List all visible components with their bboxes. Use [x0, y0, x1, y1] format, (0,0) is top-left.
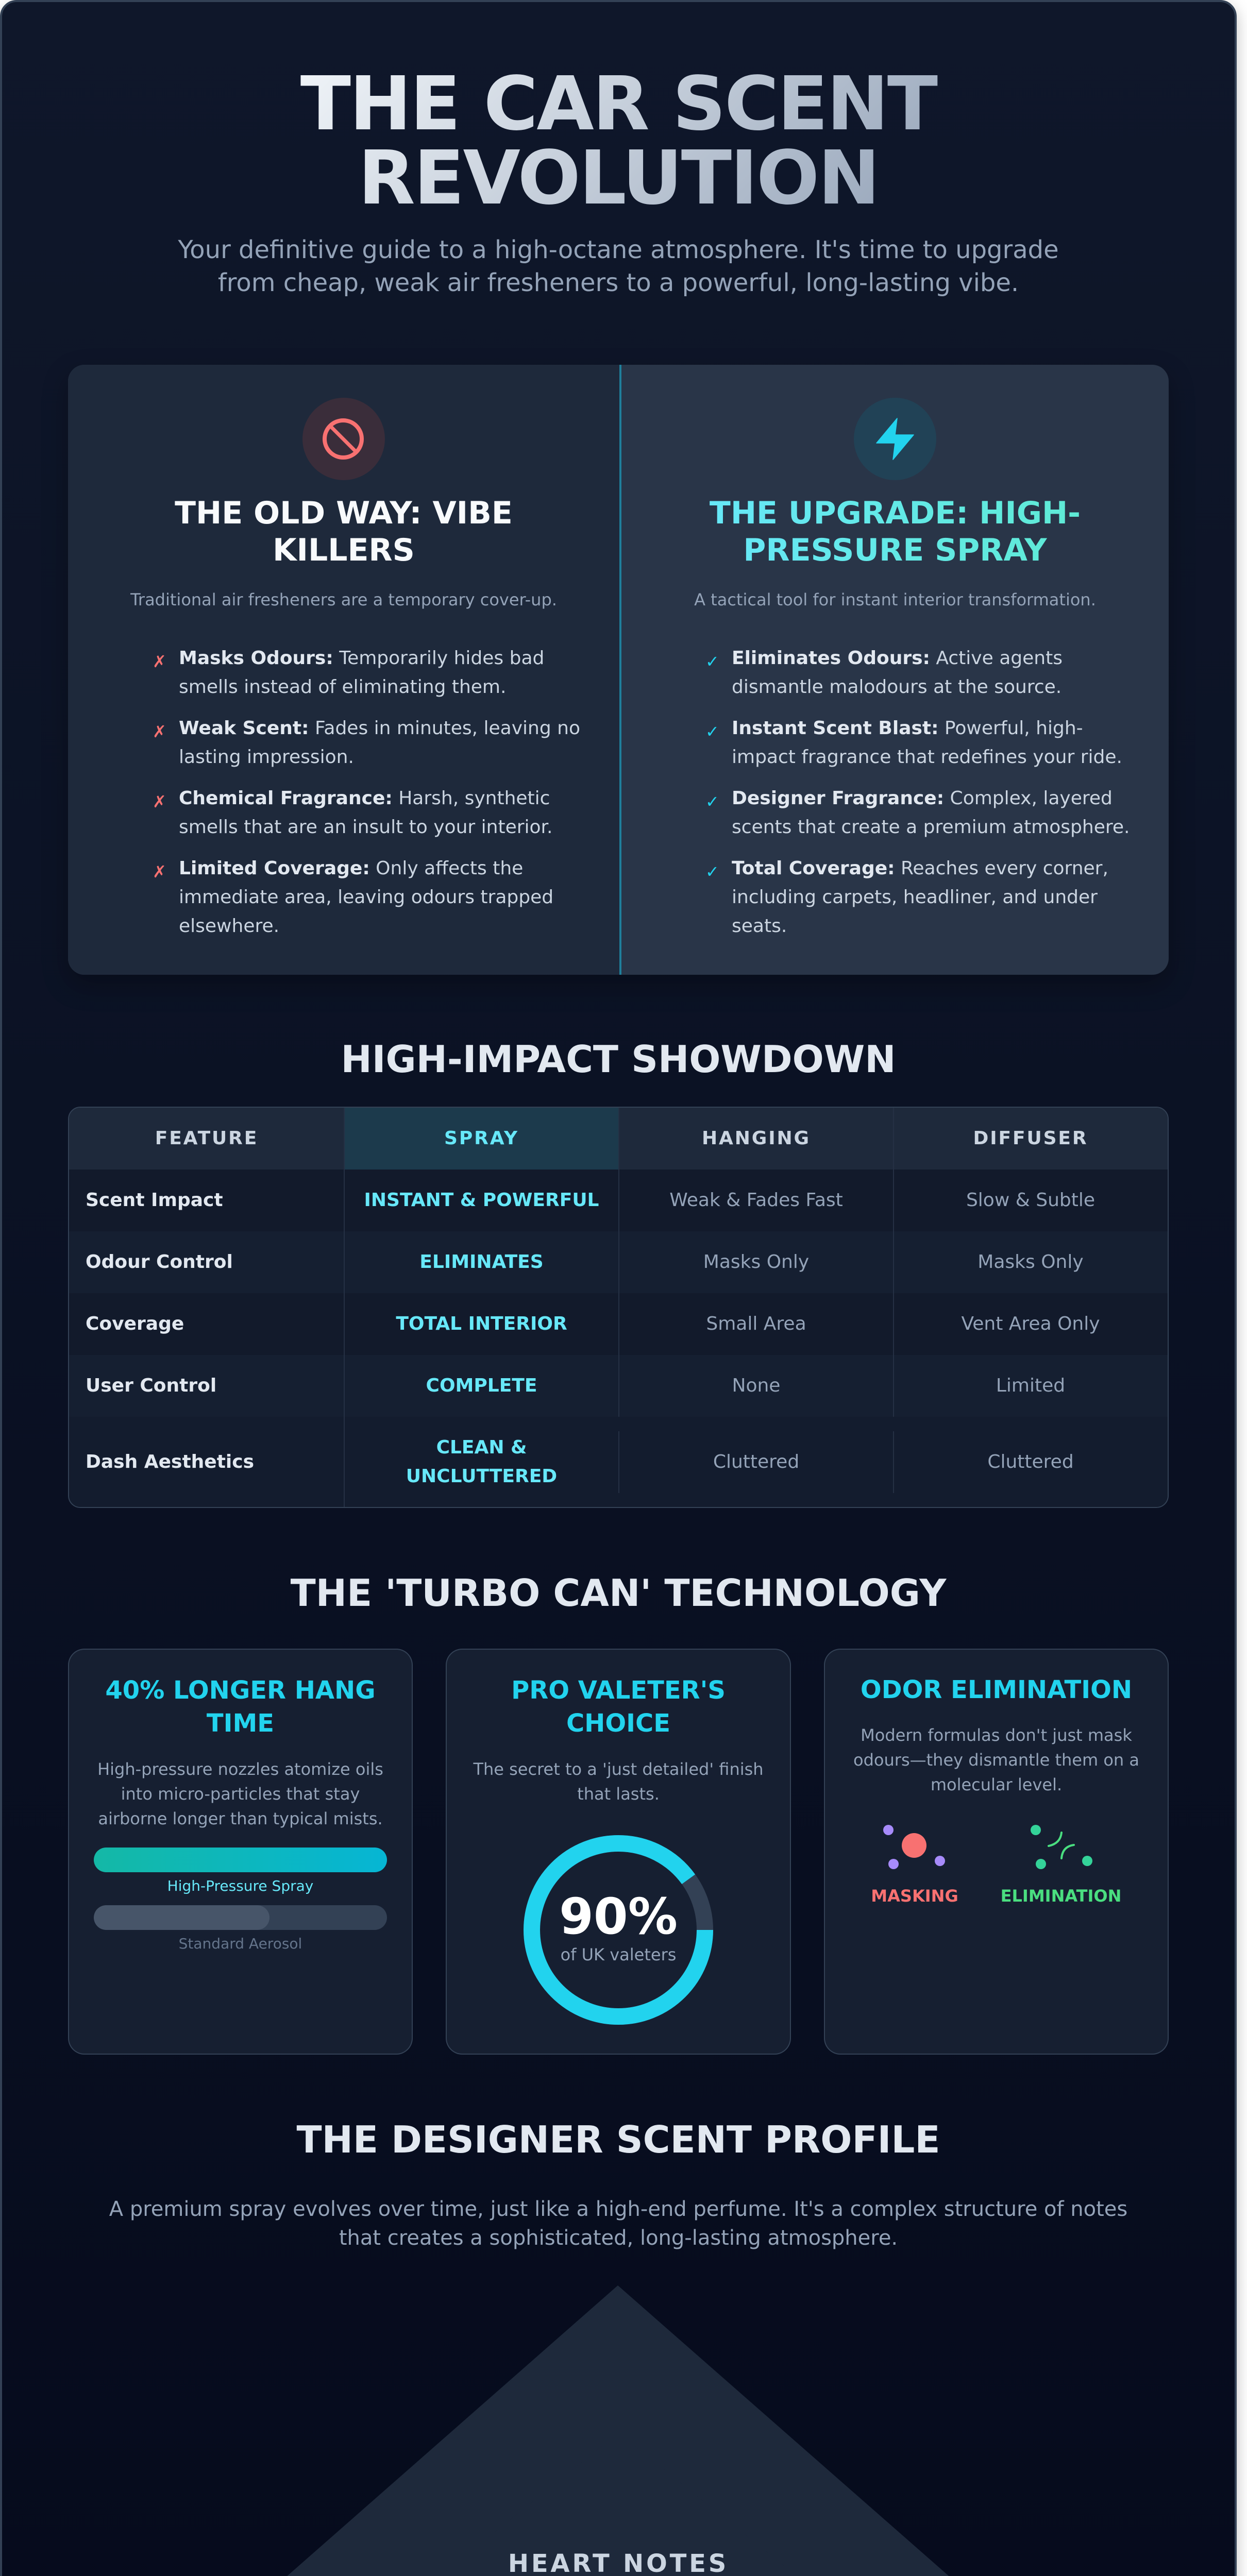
item: total coverage: Total Coverage: Reaches every corner,	[732, 858, 1108, 879]
item: designer fragrance: Designer Fragrance: Complex, layered	[732, 788, 1113, 809]
icon: ban sign	[302, 398, 385, 480]
row: scent impact: Slow & Subtle	[966, 1190, 1095, 1211]
item: masks odours: ✗	[153, 652, 166, 671]
card text: airborne longer than typical mists.	[98, 1809, 383, 1828]
row: user control: User Control	[86, 1375, 216, 1396]
card heading: PRO VALETER'S	[511, 1676, 726, 1705]
row: dash aesthetics: Dash Aesthetics	[86, 1451, 254, 1472]
section heading: turbo can: THE 'TURBO CAN' TECHNOLOGY	[291, 1571, 946, 1615]
stat caption: of UK valeters	[561, 1945, 676, 1964]
card heading: 40% LONGER HANG	[105, 1676, 376, 1705]
card heading: TIME	[207, 1709, 274, 1738]
item: limited coverage: Limited Coverage: Only affects the	[179, 858, 523, 879]
list: old way drawbacks	[153, 648, 580, 937]
row: odour control: ELIMINATES	[419, 1251, 544, 1273]
scent pyramid	[288, 2285, 949, 2576]
row: dash aesthetics: Cluttered	[987, 1451, 1074, 1472]
card heading: ODOR ELIMINATION	[861, 1675, 1132, 1704]
row: odour control: Masks Only	[978, 1251, 1084, 1273]
row: coverage: Coverage	[86, 1313, 184, 1334]
label: masking: MASKING	[871, 1886, 958, 1906]
row: coverage: Vent Area Only	[961, 1313, 1100, 1334]
item: masks odours: Masks Odours: Temporarily hides bad	[179, 648, 544, 669]
bar: high-pressure spray	[94, 1848, 387, 1872]
row: dash aesthetics	[69, 1417, 1168, 1507]
comparison table	[68, 1107, 1169, 1508]
item: eliminates odours: dismantle malodours at the source.	[732, 676, 1061, 698]
section heading: showdown: HIGH-IMPACT SHOWDOWN	[341, 1038, 896, 1081]
bar label: standard aerosol: Standard Aerosol	[179, 1935, 302, 1952]
row: coverage: TOTAL INTERIOR	[396, 1313, 567, 1334]
card: longer hang time	[68, 1649, 413, 2055]
section intro: scent profile	[109, 2197, 1127, 2250]
heading: upgrade: PRESSURE SPRAY	[743, 532, 1047, 568]
stat: 90%: 90%	[559, 1888, 678, 1945]
card text: odours—they dismantle them on a	[853, 1750, 1139, 1770]
card text	[853, 1725, 1139, 1794]
layer: base notes	[90, 2285, 1146, 2576]
card heading	[511, 1676, 726, 1738]
card text: The secret to a 'just detailed' finish	[473, 1759, 764, 1779]
item: eliminates odours: Eliminates Odours: Active agents	[732, 648, 1063, 669]
item: instant scent blast: impact fragrance that redefines your ride.	[732, 747, 1122, 768]
panel: the upgrade	[694, 398, 1130, 937]
item: limited coverage: ✗	[153, 862, 166, 882]
card text	[97, 1759, 383, 1828]
item: chemical fragrance	[153, 788, 552, 838]
card text: into micro-particles that stay	[121, 1784, 360, 1804]
item: chemical fragrance: smells that are an insult to your interior.	[179, 817, 552, 838]
section heading: scent profile: THE DESIGNER SCENT PROFILE	[296, 2118, 940, 2161]
panel: the old way	[68, 365, 619, 975]
row: coverage	[69, 1293, 1168, 1355]
heading: old way: THE OLD WAY: VIBE	[175, 495, 513, 531]
subheading: old way: Traditional air fresheners are a temporary cover-up.	[130, 590, 557, 609]
row: coverage: Small Area	[706, 1313, 806, 1334]
row: scent impact: INSTANT & POWERFUL	[364, 1190, 599, 1211]
table header row: SPRAY	[444, 1128, 519, 1149]
icon: elimination molecules	[1031, 1825, 1092, 1869]
item: eliminates odours	[705, 648, 1063, 698]
row: dash aesthetics: UNCLUTTERED	[406, 1465, 557, 1487]
heading: upgrade	[694, 495, 1097, 569]
item: total coverage: including carpets, headliner, and under	[732, 887, 1098, 908]
item: weak scent: lasting impression.	[179, 747, 354, 768]
section intro: scent profile: that creates a sophisticated, long-lasting atmosphere.	[339, 2226, 898, 2250]
item: limited coverage	[153, 858, 553, 937]
card text: Modern formulas don't just mask	[861, 1725, 1132, 1745]
card heading	[105, 1676, 376, 1738]
card text: that lasts.	[577, 1784, 660, 1804]
row: odour control	[69, 1231, 1168, 1293]
item: weak scent	[153, 718, 580, 768]
table header row	[69, 1108, 1168, 1170]
item: limited coverage: elsewhere.	[179, 916, 279, 937]
divider: teal line	[619, 365, 621, 975]
bar: standard aerosol	[94, 1905, 387, 1930]
layer: heart notes	[510, 2553, 724, 2572]
title	[289, 66, 948, 215]
card heading: CHOICE	[566, 1709, 670, 1738]
item: weak scent: ✗	[153, 722, 166, 741]
card text: High-pressure nozzles atomize oils	[97, 1759, 383, 1779]
subtitle: Your definitive guide to a high-octane atmosphere. It's time to upgrade	[178, 235, 1059, 264]
card: odor elimination	[824, 1649, 1169, 2055]
card: pro valeter's choice	[446, 1649, 791, 2055]
item: designer fragrance	[705, 788, 1130, 838]
card text	[473, 1759, 764, 1804]
donut chart: 90 percent	[524, 1835, 713, 2025]
subtitle	[178, 235, 1059, 297]
table header row: FEATURE	[155, 1128, 258, 1149]
title: REVOLUTION	[358, 134, 879, 221]
item: chemical fragrance: ✗	[153, 792, 166, 811]
heading: old way: KILLERS	[273, 532, 415, 568]
row: odour control: Masks Only	[703, 1251, 809, 1273]
header	[178, 60, 1059, 297]
subtitle: from cheap, weak air fresheners to a powerful, long-lasting vibe.	[218, 268, 1019, 297]
item: designer fragrance: ✓	[705, 792, 719, 811]
item: instant scent blast: ✓	[705, 722, 719, 741]
row: dash aesthetics: Cluttered	[713, 1451, 799, 1472]
item: total coverage: ✓	[705, 862, 719, 882]
item: limited coverage: immediate area, leaving odours trapped	[179, 887, 553, 908]
section intro: scent profile: A premium spray evolves over time, just like a high-end perfume. It's a complex structure of notes	[109, 2197, 1127, 2221]
item: eliminates odours: ✓	[705, 652, 719, 671]
row: user control: COMPLETE	[426, 1375, 537, 1396]
table header row: DIFFUSER	[973, 1128, 1088, 1149]
heading: upgrade: THE UPGRADE: HIGH-	[710, 495, 1081, 531]
heading: old way	[175, 495, 513, 568]
item: instant scent blast: Instant Scent Blast: Powerful, high-	[732, 718, 1083, 739]
item: masks odours	[153, 648, 544, 698]
row: dash aesthetics: CLEAN &	[436, 1436, 527, 1458]
icon: masking molecules	[883, 1825, 945, 1869]
row: scent impact: Scent Impact	[86, 1190, 223, 1211]
item: masks odours: smells instead of eliminating them.	[179, 676, 506, 698]
item: total coverage: seats.	[732, 916, 787, 937]
title: THE CAR SCENT	[300, 60, 936, 147]
item: chemical fragrance: Chemical Fragrance: Harsh, synthetic	[179, 788, 550, 809]
label: elimination: ELIMINATION	[1001, 1886, 1121, 1906]
subheading: upgrade: A tactical tool for instant interior transformation.	[694, 590, 1096, 609]
row: odour control: Odour Control	[86, 1251, 233, 1273]
row: user control: None	[732, 1375, 780, 1396]
item: designer fragrance: scents that create a premium atmosphere.	[732, 817, 1130, 838]
card text: molecular level.	[931, 1775, 1062, 1794]
icon: lightning bolt	[854, 398, 936, 480]
row: scent impact: Weak & Fades Fast	[669, 1190, 843, 1211]
row: scent impact	[69, 1170, 1168, 1231]
panel: comparison old way vs upgrade	[68, 365, 1169, 975]
row: user control	[69, 1355, 1168, 1417]
table header row: HANGING	[702, 1128, 811, 1149]
item: total coverage	[705, 858, 1108, 937]
item: instant scent blast	[705, 718, 1122, 768]
bar label: high-pressure spray: High-Pressure Spray	[167, 1877, 313, 1894]
row: user control: Limited	[996, 1375, 1065, 1396]
item: weak scent: Weak Scent: Fades in minutes, leaving no	[179, 718, 580, 739]
list: upgrade benefits	[705, 648, 1130, 937]
